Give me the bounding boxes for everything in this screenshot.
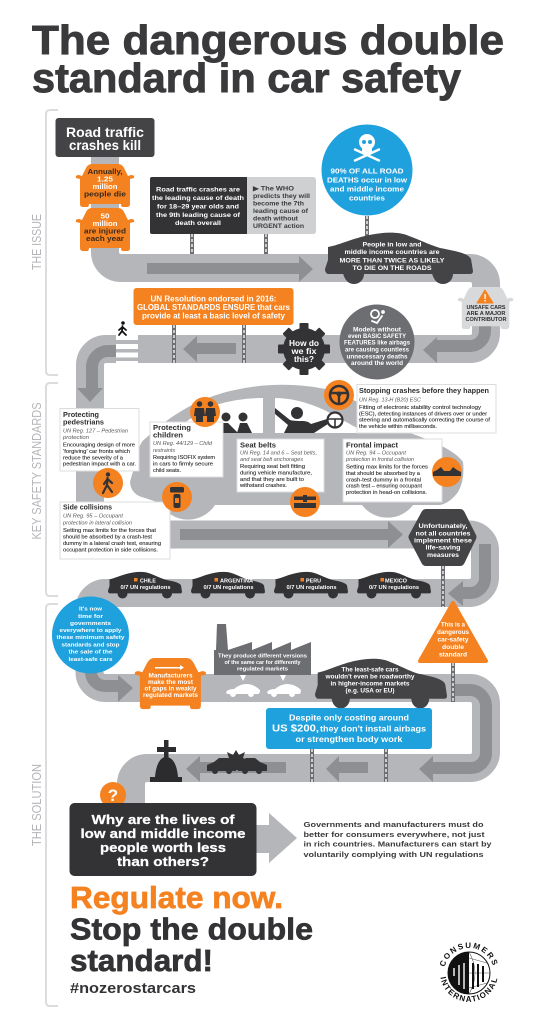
light panel: WHO prediction: predicts they will [253, 193, 310, 200]
panel: seat belts: UN Reg. 14 and 6 – Seat belts, [240, 450, 317, 456]
grey circle: models without safety features [340, 304, 414, 380]
section brackets and labels [29, 110, 58, 1006]
orange car: annual deaths: Annually, [88, 169, 123, 176]
panel: frontal impact: crash test – ensuring occupant [346, 484, 423, 490]
heading box: road traffic crashes kill [56, 118, 154, 157]
car: Argentina: ARGENTINA [220, 578, 253, 584]
call to action [70, 880, 313, 997]
grey circle: models without safety features: around the world [351, 360, 403, 367]
blue box: US $200: US $200, [272, 724, 319, 734]
panel: stopping crashes: the vehicle within milliseconds. [359, 424, 437, 430]
panel: protecting children: UN Reg. 44/129 – Child [153, 441, 213, 447]
light panel: WHO prediction: death without [253, 216, 299, 222]
dark box: why are the lives: low and middle income [80, 826, 246, 841]
text block: governments and manufacturers [304, 820, 492, 859]
dark box: why are the lives: people worth less [100, 840, 226, 855]
hexagon: unfortunately not all countries: implement these [414, 538, 472, 544]
road direction arrows [77, 256, 486, 782]
blue circle: time for governments: governments [70, 621, 112, 627]
hexagon: unfortunately not all countries: Unfortunately, [418, 523, 468, 530]
car: Mexico: 0/7 UN regulations [369, 585, 419, 591]
heading box: road traffic crashes kill: crashes kill [69, 138, 141, 153]
panel: stopping crashes: Fitting of electronic stability control technology [359, 405, 481, 411]
panel: protecting pedestrians: UN Reg. 127 – Pedestrian [63, 428, 128, 434]
panel: stopping crashes: UN Reg. 13-H (B20) ESC [359, 398, 421, 404]
orange car: manufacturers: regulated markets [143, 693, 199, 699]
orange car: injuries: million [92, 221, 118, 228]
dark panel: leading cause of death: the leading cause of death [152, 195, 244, 202]
orange car: manufacturers: of gaps in weakly [144, 686, 197, 692]
white cars with markers [226, 675, 301, 697]
icon: skull and crossbones [355, 134, 379, 160]
dark panel: leading cause of death: the 9th leading cause of [156, 212, 241, 219]
car: Argentina: 0/7 UN regulations [204, 585, 254, 591]
panel: protecting pedestrians: protection [62, 435, 89, 441]
icon: steering wheel badge [324, 380, 354, 410]
panel: stopping crashes: Stopping crashes before they happen [359, 386, 489, 395]
text block: governments and manufacturers: in rich countries. Manufacturers can start by [304, 840, 492, 848]
panel: seat belts: Seat belts [240, 440, 276, 450]
dark car: least-safe cars: The least-safe cars [342, 668, 399, 674]
panel: protecting children: child seats. [153, 468, 181, 474]
car: Argentina [191, 572, 265, 599]
panel: side collisions: Setting max limits for the forces that [63, 528, 157, 534]
dark panel: leading cause of death: for 18–29 year olds and [157, 204, 239, 210]
blue circle: time for governments: time for [78, 614, 104, 620]
panel: protecting pedestrians: pedestrians [63, 418, 104, 426]
gear: how do we fix this: How do [289, 339, 319, 348]
dark panel: leading cause of death: death overall [175, 220, 221, 227]
icon: pedestrian badge [93, 468, 123, 498]
hexagon: unfortunately not all countries: not all countries [416, 530, 471, 538]
panel: side collisions: should be absorbed by a crash-test [63, 534, 153, 540]
car: Mexico [357, 572, 431, 599]
orange triangle: double standard: car-safety [438, 638, 469, 644]
orange car: injuries: 50 [100, 214, 110, 220]
dark car: least-safe cars [315, 659, 447, 708]
icon: crashed cars [207, 750, 267, 774]
dark car: twice as likely to die: People in low and [362, 242, 422, 248]
dark car: twice as likely to die: MORE THAN TWICE AS LIKELY [340, 258, 445, 264]
light panel: WHO prediction: become the 7th [253, 200, 304, 208]
panel: protecting children: restraints [153, 448, 175, 454]
blue box: US $200 [266, 708, 432, 749]
dark car: twice as likely to die: middle income countries are [344, 249, 440, 256]
orange triangle: double standard: dangerous [437, 630, 470, 636]
blue circle: time for governments: these minimum safety [56, 635, 125, 641]
light car: unsafe cars major contributor [458, 287, 513, 329]
dark box: why are the lives [70, 803, 256, 876]
orange triangle: double standard [420, 603, 486, 661]
grey circle: models without safety features: Models without [353, 326, 401, 334]
title [32, 17, 504, 101]
orange car: manufacturers: make the most [148, 680, 193, 686]
car: Chile [108, 572, 182, 599]
dark panel: leading cause of death [150, 177, 248, 234]
orange triangle: double standard: double [442, 645, 465, 651]
gear: how do we fix this: we fix [290, 347, 317, 356]
rear passengers [222, 412, 252, 433]
light car: unsafe cars major contributor: UNSAFE CARS [466, 305, 506, 311]
sign posts [174, 216, 453, 782]
central car diagram [130, 385, 463, 520]
panel: protecting children: in cars to firmly secure [153, 462, 213, 468]
panel: stopping crashes: steering and automatically correcting the course of [359, 418, 491, 424]
panel: seat belts [237, 439, 324, 492]
light panel: WHO prediction: ▶ The WHO [252, 186, 294, 192]
blue circle: time for governments: the sale of the [68, 650, 113, 656]
blue circle: 90% of road deaths [322, 124, 412, 216]
icon: walking pedestrian [119, 321, 126, 335]
panel: frontal impact: Setting max limits for the forces [346, 464, 428, 470]
light panel: WHO prediction: leading cause of [253, 208, 309, 215]
orange banner: UN resolution: GLOBAL STANDARDS ENSURE that cars [137, 303, 291, 312]
panel: frontal impact [343, 439, 442, 502]
dark car: least-safe cars: (e.g. USA or EU) [346, 688, 394, 694]
panel: protecting pedestrians: Protecting [63, 410, 99, 419]
blue circle: time for governments: standards and stop [62, 642, 120, 648]
logo: Consumers International [440, 942, 498, 1002]
dark car: least-safe cars: in higher-income markets [330, 682, 410, 688]
car: Peru [274, 572, 348, 599]
orange car: annual deaths: people die [84, 192, 126, 198]
panel: protecting children: Requiring ISOFIX system [153, 455, 216, 461]
panel: stopping crashes [357, 384, 496, 433]
orange car: annual deaths: 1.25 [97, 176, 113, 184]
heading box: road traffic crashes kill: Road traffic [66, 125, 145, 140]
title: standard in car safety [32, 55, 461, 101]
panel: protecting pedestrians: ‘forgiving’ car fronts which [63, 449, 130, 455]
pedestrian crossing [116, 335, 138, 363]
icon: frontal crash badge [432, 457, 462, 487]
orange banner: UN resolution: UN Resolution endorsed in 2016: [150, 294, 276, 304]
factory: of the same car for differently [224, 660, 301, 666]
grey circle: models without safety features: are causing countless [345, 346, 410, 354]
panel: protecting children: Protecting [153, 423, 191, 432]
title: The dangerous double [32, 17, 504, 63]
factory: regulated markets [237, 666, 289, 672]
winding grey road [90, 150, 486, 815]
light car: unsafe cars major contributor: ARE A MAJOR [466, 311, 506, 317]
orange triangle: double standard: standard [439, 652, 467, 658]
grey circle: models without safety features: even BASIC SAFETY [348, 333, 407, 340]
label: the issue: THE ISSUE [29, 214, 44, 270]
blue circle: time for governments: It's now [79, 606, 102, 612]
car: Mexico: MEXICO [385, 578, 407, 584]
panel: seat belts: during vehicle manufacture, [240, 470, 313, 476]
hexagon: unfortunately not all countries [408, 509, 476, 566]
panel: protecting pedestrians: Encouraging design of more [63, 442, 135, 448]
orange car: annual deaths: million [92, 184, 118, 191]
icon: airbag [371, 310, 384, 323]
blue box: US $200: they don't install airbags [320, 724, 427, 734]
grey circle: models without safety features: FEATURES like airbags [344, 340, 411, 346]
text block: governments and manufacturers: voluntarily complying with UN regulations [304, 850, 484, 859]
icon: warning triangle [477, 290, 493, 303]
large arrow to conclusion [250, 813, 297, 863]
blue box: US $200: Despite only costing around [289, 714, 409, 722]
orange car: injuries [76, 208, 134, 251]
panel: seat belts: and that they are built to [240, 477, 304, 483]
panel: seat belts: withstand crashes. [239, 483, 287, 489]
light panel: WHO prediction: URGENT action [253, 223, 304, 230]
panel: protecting children [150, 422, 223, 477]
panel: protecting pedestrians: pedestrian impact with a car. [63, 462, 136, 468]
factory: They produce different versions [218, 654, 308, 660]
dark car: twice as likely to die: TO DIE ON THE ROADS [352, 265, 432, 272]
gear: how do we fix this [278, 323, 330, 375]
logo: Consumers International: INTERNATIONAL [440, 976, 498, 1002]
hashtag: #nozerostarcars [70, 980, 196, 997]
call to action: standard! [70, 943, 213, 978]
orange banner: UN resolution [134, 288, 294, 325]
dark box: why are the lives: Why are the lives of [92, 812, 235, 827]
blue circle: 90% of road deaths: countries [349, 194, 385, 202]
panel: frontal impact: protection in frontal collision [345, 457, 414, 463]
icon: gravestone with cross [150, 740, 182, 782]
blue circle: time for governments [52, 596, 129, 674]
panel: frontal impact: crash-test dummy in a frontal [346, 478, 421, 484]
panel: protecting pedestrians: reduce the severity of a [63, 456, 123, 462]
dark car: twice as likely to die [325, 233, 473, 284]
blue circle: 90% of road deaths: and middle income [330, 184, 404, 194]
panel: protecting children: children [153, 430, 183, 440]
hexagon: unfortunately not all countries: life-saving [426, 544, 460, 552]
panel: side collisions: occupant protection in side collisions. [63, 548, 158, 554]
panel: protecting pedestrians [60, 408, 139, 471]
blue circle: 90% of road deaths: DEATHS occur in low [327, 176, 407, 184]
orange car: annual deaths [76, 164, 134, 207]
blue circle: time for governments: least-safe cars [68, 657, 113, 663]
text block: governments and manufacturers: better for consumers everywhere, not just [304, 830, 485, 839]
icon: question mark badge [100, 782, 126, 808]
panel: side collisions: dummy in a lateral crash test, ensuring [63, 541, 161, 547]
factory [214, 624, 311, 675]
panel: side collisions: protection in lateral collision [62, 520, 132, 526]
arrow [155, 665, 184, 670]
dark box: why are the lives: than others? [117, 854, 209, 869]
panel: frontal impact: UN Reg. 94 – Occupant [346, 450, 407, 456]
car: Peru: 0/7 UN regulations [286, 585, 336, 591]
icon: question mark badge: ? [108, 786, 118, 805]
panel: seat belts: and seat belt anchorages [240, 457, 303, 463]
light panel: WHO prediction [247, 177, 316, 234]
dark car: least-safe cars: wouldn't even be roadworthy [324, 674, 415, 680]
panel: stopping crashes: (ESC), detecting instances of drivers over or under [359, 412, 487, 418]
blue circle: time for governments: everywhere to apply [60, 628, 122, 634]
driver at the wheel [275, 407, 342, 433]
panel: frontal impact: protection in head-on collisions. [346, 490, 427, 496]
call to action: Regulate now. [70, 880, 283, 915]
panel: seat belts: Requiring seat belt fitting [240, 464, 305, 470]
panel: frontal impact: that should be absorbed by a [346, 471, 420, 477]
text block: governments and manufacturers: Governments and manufacturers must do [304, 820, 484, 829]
label: the solution: THE SOLUTION [29, 764, 44, 846]
orange banner: UN resolution: provide at least a basic level of safety [142, 312, 286, 320]
panel: side collisions: Side collisions [63, 502, 112, 512]
orange car: manufacturers [135, 658, 206, 709]
icon: children badge [190, 397, 220, 427]
car: Chile: CHILE [140, 578, 156, 584]
panel: side collisions [60, 502, 170, 559]
panel: frontal impact: Frontal impact [346, 440, 399, 450]
dark panel: leading cause of death: Road traffic crashes are [156, 186, 240, 194]
orange car: manufacturers: Manufacturers [148, 674, 193, 680]
blue circle: 90% of road deaths: 90% OF ALL ROAD [330, 166, 404, 176]
icon: side collision badge [162, 482, 192, 512]
panel: side collisions: UN Reg. 95 – Occupant [63, 514, 124, 520]
label: key safety standards: KEY SAFETY STANDARDS [29, 402, 44, 540]
grey circle: models without safety features: unnecessary deaths [346, 354, 408, 360]
blue box: US $200: or strengthen body work [296, 735, 403, 744]
car: Peru: PERU [306, 578, 321, 584]
light car: unsafe cars major contributor: CONTRIBUTOR [466, 317, 507, 323]
icon: seat belt badge [290, 487, 320, 517]
gear: how do we fix this: this? [294, 355, 314, 364]
car: Chile: 0/7 UN regulations [120, 585, 170, 591]
logo: Consumers International: CONSUMERS [440, 942, 498, 966]
hexagon: unfortunately not all countries: measures [427, 552, 459, 559]
orange triangle: double standard: This is a [441, 622, 466, 628]
call to action: Stop the double [70, 912, 313, 946]
orange car: injuries: each year [86, 236, 124, 243]
orange car: injuries: are injured [84, 228, 126, 236]
